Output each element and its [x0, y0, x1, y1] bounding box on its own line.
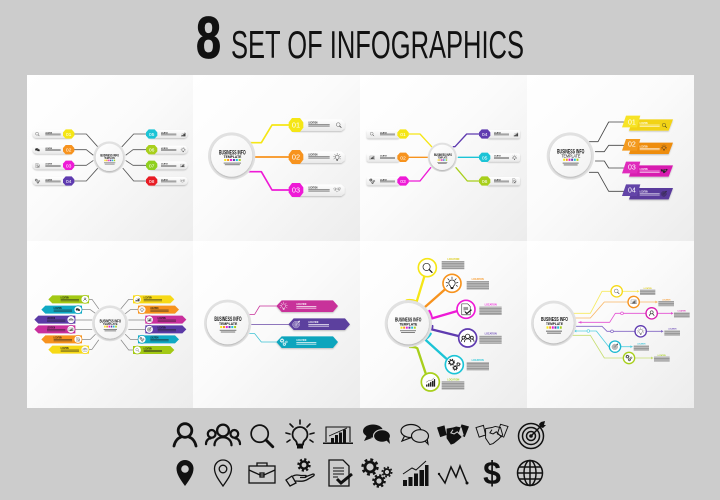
central hub: TEMPLATE: [546, 321, 563, 326]
icon: search: [251, 425, 273, 447]
icon: growth bars: [403, 461, 428, 486]
ribbon 4: 04: [628, 187, 636, 194]
right arrows: LOCATION: [158, 317, 166, 320]
right arrows: [133, 295, 186, 354]
panel 6: three arrow banners: [193, 241, 360, 408]
circle bars: [421, 373, 439, 391]
label bars: [293, 119, 345, 196]
central hub: BUSINESS INFO: [100, 154, 119, 158]
banner purple: [288, 318, 350, 330]
central hub: BUSINESS INFO: [541, 317, 568, 323]
labels: LOCATION: [485, 302, 497, 306]
number hexagons: 05: [482, 155, 488, 161]
number hexagons: 07: [149, 163, 155, 169]
icon: person: [174, 424, 196, 446]
labels: LOCATION: [447, 257, 459, 261]
left arrows: LOCATION: [54, 337, 62, 340]
number hexagons: 04: [66, 179, 72, 185]
icon: gears: [362, 460, 392, 487]
right pills: LOCATION: [161, 147, 168, 150]
number hexagons: 02: [400, 155, 406, 161]
banner purple: LOCATION: [308, 320, 318, 324]
title number 8: 8: [196, 5, 221, 71]
small line nodes: [587, 312, 623, 333]
ribbon 2: LOCATION: [640, 145, 648, 148]
ribbon 3: [622, 162, 673, 177]
ribbon 2: 02: [628, 142, 636, 149]
number hexagons: 03: [292, 186, 300, 195]
title words: SET OF INFOGRAPHICS: [231, 24, 524, 67]
label pills: LOCATION: [380, 178, 387, 181]
banner teal: LOCATION: [296, 338, 306, 342]
labels: LOCATION: [472, 358, 484, 362]
panel 4: four step ribbons: [527, 75, 694, 241]
left arrows: LOCATION: [47, 327, 55, 330]
label bars: LOCATION: [308, 154, 318, 157]
banner teal: [276, 336, 338, 348]
ribbon 1: [622, 116, 673, 131]
icon row 1: [174, 420, 546, 448]
icon: chart: [323, 427, 353, 443]
left pills: LOCATION: [45, 147, 52, 150]
icon: outline pin: [214, 460, 232, 486]
labels: LOCATION: [447, 377, 459, 381]
connector lines: [75, 299, 145, 350]
panel 2: three step hexagon: [193, 75, 360, 241]
number hexagons: 06: [482, 179, 488, 185]
icon: filled handshake: [437, 424, 469, 445]
right arrows: LOCATION: [158, 327, 166, 330]
icon: team: [206, 425, 240, 445]
central hub: BUSINESS INFO: [214, 317, 242, 323]
central hub: TEMPLATE: [104, 157, 115, 160]
labels: LOCATION: [678, 310, 686, 313]
icon: zigzag line: [438, 466, 468, 484]
label pills: [367, 130, 520, 185]
icon: dollar: $: [483, 455, 501, 491]
number hexagons: 02: [66, 148, 72, 154]
labels: LOCATION: [644, 287, 652, 290]
labels: LOCATION: [662, 298, 671, 301]
label pills: LOCATION: [494, 155, 501, 158]
right arrows: LOCATION: [144, 297, 152, 300]
labels: LOCATION: [485, 332, 497, 336]
central hub: BUSINESS INFO: [219, 149, 246, 156]
circuit lines: [566, 291, 671, 358]
central hub: [208, 132, 255, 180]
number hexagons: 02: [292, 153, 300, 162]
left pills: LOCATION: [45, 163, 52, 166]
connector lines: [74, 134, 146, 181]
right pills: LOCATION: [161, 178, 168, 181]
left pills: [33, 130, 73, 185]
icon: filled chat: [363, 424, 390, 444]
number hexagons: 05: [149, 132, 155, 138]
panel 1: eight step hexagon: [27, 75, 194, 241]
circle target: [609, 341, 621, 352]
circle team: [459, 329, 477, 347]
central hub: BUSINESS INFO: [434, 153, 452, 157]
right arrows: LOCATION: [144, 347, 152, 350]
arrow heads: [566, 290, 674, 359]
number hexagons: 04: [482, 132, 488, 138]
number hexagons: [397, 129, 490, 186]
circle gears: [623, 352, 635, 364]
circle document: [457, 300, 475, 318]
banner magenta: LOCATION: [296, 302, 306, 306]
central hub: TEMPLATE: [438, 157, 448, 160]
central hub: TEMPLATE: [561, 154, 580, 159]
connector lines: [248, 125, 290, 190]
number hexagons: 01: [292, 121, 300, 130]
ribbon 3: LOCATION: [640, 168, 648, 171]
central hub: BUSINESS INFO: [557, 149, 584, 156]
icon: target: [518, 421, 546, 448]
circle bulb: [635, 326, 646, 337]
right pills: [148, 130, 188, 185]
icon: briefcase: [249, 463, 275, 483]
labels: [634, 287, 690, 362]
labels: LOCATION: [637, 342, 646, 345]
number hexagons: 03: [66, 163, 72, 169]
right pills: LOCATION: [161, 131, 168, 134]
left arrows: [34, 295, 89, 354]
circle search: [611, 286, 622, 297]
central hub: TEMPLATE: [219, 321, 238, 326]
branches and hub arc: [407, 274, 458, 374]
central hub: [531, 301, 576, 346]
number hexagons: [63, 129, 157, 186]
connector lines: [250, 306, 288, 342]
panel 5: twelve arrows: [27, 241, 194, 408]
central hub: [385, 300, 432, 347]
central hub: TEMPLATE: [103, 322, 118, 326]
central hub: TEMPLATE: [399, 321, 418, 326]
central hub: [428, 143, 457, 172]
central hub: BUSINESS INFO: [100, 318, 121, 323]
left arrows: LOCATION: [54, 307, 62, 310]
connector lines: [407, 134, 479, 181]
labels: [442, 257, 502, 390]
ribbon 2: [622, 139, 673, 154]
circle gears: [445, 356, 463, 374]
panel 7: radial branches: [360, 241, 527, 408]
circle search: [418, 259, 436, 277]
number hexagons: 06: [149, 148, 155, 154]
right arrows: LOCATION: [150, 337, 159, 340]
central hub: [547, 132, 594, 180]
labels: LOCATION: [668, 328, 677, 331]
icon: light bulb: [286, 420, 314, 448]
number hexagons: [289, 118, 303, 197]
icon: outline handshake: [476, 424, 508, 445]
central hub: TEMPLATE: [224, 155, 242, 159]
central hub: [92, 305, 128, 341]
title: [196, 5, 524, 71]
icon: globe: [518, 460, 542, 486]
circle person: [646, 308, 657, 319]
number hexagons: 03: [400, 179, 406, 185]
circle bulb: [443, 274, 461, 292]
left pills: LOCATION: [45, 178, 52, 181]
number hexagons: 01: [400, 132, 406, 138]
left arrows: LOCATION: [61, 347, 69, 350]
ribbon 3: 03: [628, 165, 636, 172]
right pills: LOCATION: [161, 163, 168, 166]
central hub: [93, 141, 125, 173]
icon: hand with gear: [286, 459, 314, 486]
label pills: LOCATION: [494, 131, 501, 134]
connector lines: [589, 122, 624, 191]
circle chart: [628, 296, 639, 308]
label bars: LOCATION: [308, 187, 318, 190]
banner magenta: [276, 300, 338, 312]
left arrows: LOCATION: [47, 317, 55, 320]
label pills: LOCATION: [494, 178, 501, 181]
ribbon 4: [622, 184, 673, 199]
left pills: LOCATION: [45, 131, 52, 134]
central hub: BUSINESS INFO: [395, 317, 422, 323]
icon: checked document: [329, 460, 352, 486]
ribbon 4: LOCATION: [640, 191, 648, 194]
central hub: [204, 300, 251, 347]
ribbon 1: 01: [628, 119, 636, 126]
icon: outline chat: [401, 424, 428, 444]
left arrows: LOCATION: [61, 297, 69, 300]
label bars: LOCATION: [308, 122, 318, 125]
ribbon 1: LOCATION: [640, 122, 648, 125]
panel 3: six step hexagon: [360, 75, 527, 241]
number hexagons: 08: [149, 179, 155, 185]
label pills: LOCATION: [380, 131, 387, 134]
labels: LOCATION: [472, 277, 484, 281]
panel 8: circuit lines: [527, 241, 694, 408]
icon: filled pin: [176, 460, 194, 486]
number hexagons: 01: [66, 132, 72, 138]
right arrows: LOCATION: [150, 307, 159, 310]
label pills: LOCATION: [380, 155, 387, 158]
icon row 2: [176, 455, 542, 491]
labels: LOCATION: [658, 354, 666, 357]
